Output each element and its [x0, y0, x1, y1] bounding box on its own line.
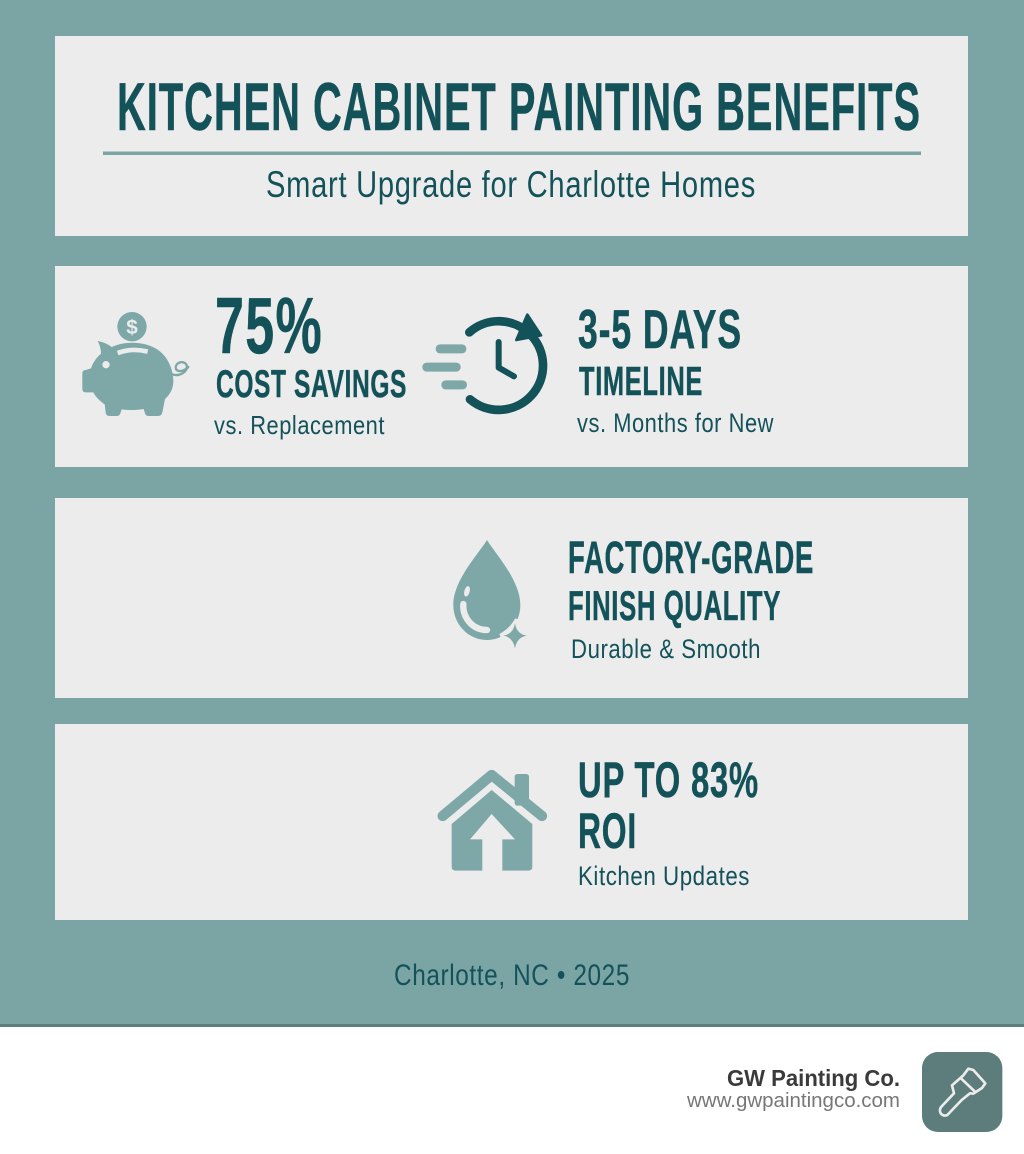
icon: piggy bank	[82, 312, 188, 416]
footer brand	[686, 1052, 1002, 1132]
company name: GW Painting Co.	[727, 1065, 900, 1091]
stat: cost savings: 75%	[215, 281, 323, 370]
subtitle: Smart Upgrade for Charlotte Homes	[266, 164, 756, 205]
stat: factory-grade finish: FINISH QUALITY	[568, 582, 781, 629]
icon: paint drop	[453, 540, 533, 653]
stat: timeline	[577, 298, 774, 438]
stat: cost savings: vs. Replacement	[214, 410, 385, 440]
panel: title	[55, 36, 968, 236]
panel: return on investment	[55, 724, 968, 920]
stat: timeline: 3-5 DAYS	[578, 298, 742, 360]
icon: paint brush logo	[922, 1052, 1002, 1132]
stat: ROI: ROI	[578, 803, 637, 859]
stat: cost savings	[214, 281, 407, 440]
stat: cost savings: COST SAVINGS	[216, 363, 407, 406]
stat: ROI: Kitchen Updates	[578, 861, 750, 891]
location and year: Charlotte, NC • 2025	[394, 959, 630, 992]
icon: house with up arrow	[443, 774, 542, 871]
stat: factory-grade finish: Durable & Smooth	[571, 634, 761, 664]
stat: factory-grade finish: FACTORY-GRADE	[568, 532, 814, 583]
stat: timeline: vs. Months for New	[577, 408, 774, 438]
icon: fast clock	[422, 315, 543, 410]
stat: ROI: UP TO 83%	[578, 752, 759, 808]
stat: timeline: TIMELINE	[579, 358, 703, 404]
panel: finish quality	[55, 498, 968, 698]
website: www.gwpaintingco.com	[686, 1090, 900, 1112]
stat: factory-grade finish	[568, 532, 814, 664]
icon: piggy bank: $	[126, 316, 138, 339]
stat: ROI	[578, 752, 759, 891]
panel: savings and timeline	[55, 266, 968, 467]
